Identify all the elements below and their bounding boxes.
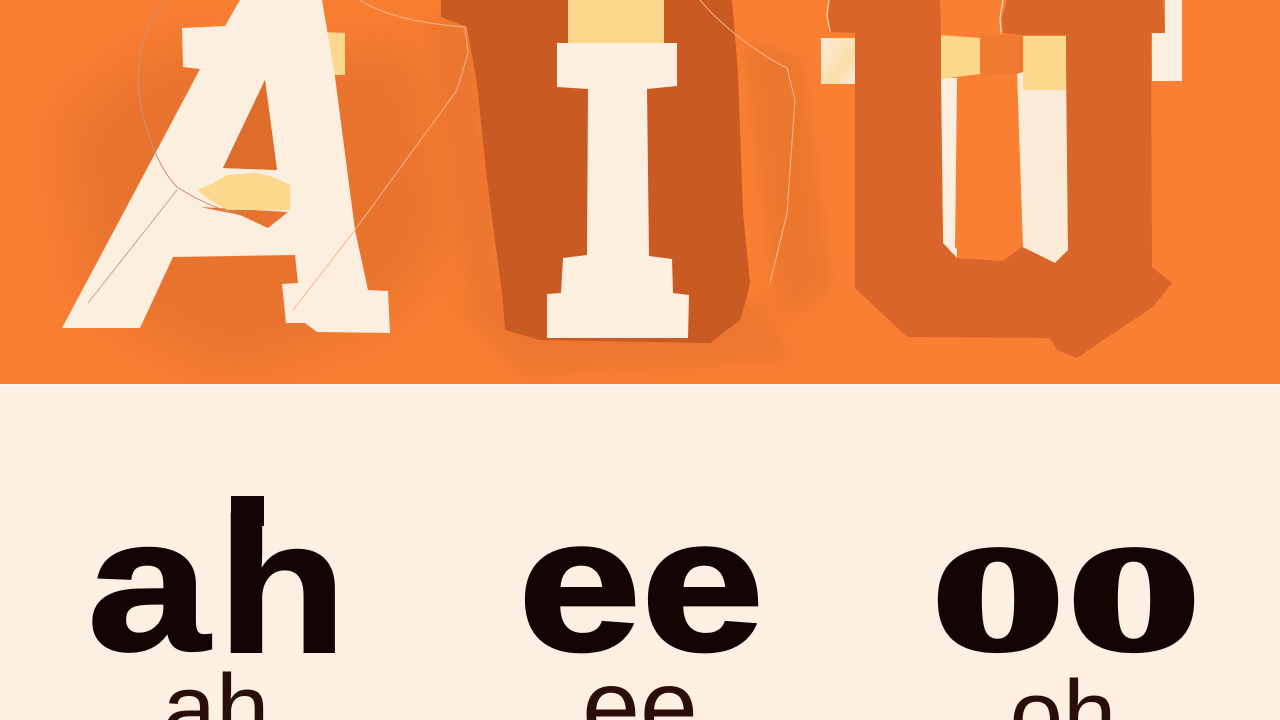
panel: cream lower section: [0, 384, 1280, 720]
sketch line right of A: [293, 0, 468, 310]
icon: yellow tab right of A: [322, 32, 345, 75]
large phonetic label ah: [87, 478, 347, 693]
sketch line left of A: [88, 190, 177, 303]
panel: letter I: [441, 0, 795, 343]
yellow bands: [941, 35, 980, 79]
orange inner strip: [955, 74, 1022, 261]
cream outer right tab: [1152, 0, 1182, 81]
large phonetic label ah: a: [87, 478, 211, 691]
dark brush block behind I: [441, 0, 750, 343]
letter A body: [62, 0, 390, 333]
large phonetic label ah: h: [217, 480, 347, 693]
letter I body: [547, 43, 689, 338]
yellow cap above I: [568, 0, 664, 46]
orange notch in A crossbar: [200, 207, 288, 228]
sketch curve around A: [138, 0, 240, 215]
cream outer left tab: [821, 38, 855, 84]
letter A counter: [223, 80, 277, 170]
yellow patch on A crossbar: [197, 173, 290, 210]
large phonetic label ee: ee: [518, 479, 764, 691]
cream hairlines at top of U: [827, 0, 1003, 34]
letter U body: [828, 0, 1172, 358]
sketch line right of I: [700, 0, 795, 283]
cream inner columns: [941, 78, 1003, 262]
large phonetic label oo: oo: [930, 460, 1202, 695]
panel: letter U: [821, 0, 1182, 358]
panel: orange top background: [0, 0, 1280, 384]
panel: letter A: [62, 0, 468, 333]
